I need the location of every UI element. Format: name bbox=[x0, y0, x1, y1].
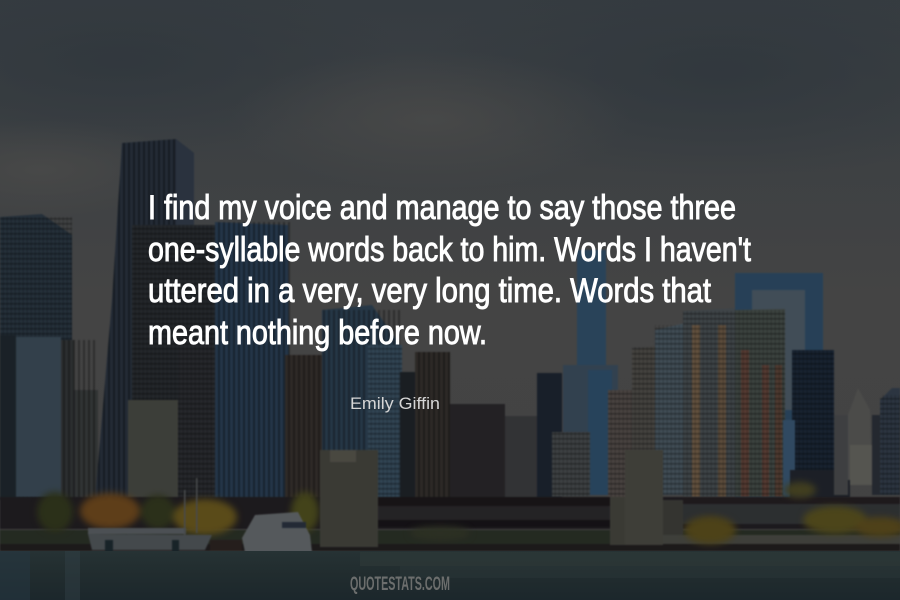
quote line 3: uttered in a very, very long time. Words that bbox=[148, 272, 711, 310]
far right towers bbox=[834, 415, 848, 495]
quote line 1: I find my voice and manage to say those three bbox=[148, 189, 736, 227]
quote line 2: one-syllable words back to him. Words I haven't bbox=[148, 231, 751, 269]
autumn trees bbox=[37, 482, 900, 544]
center blue tower bbox=[577, 250, 606, 370]
author name: Emily Giffin bbox=[350, 394, 440, 413]
left block bbox=[0, 214, 72, 500]
right residential towers bbox=[632, 345, 664, 495]
quote line 4: meant nothing before now. bbox=[148, 314, 487, 352]
shoreline bbox=[0, 530, 900, 550]
tall left tower bbox=[95, 139, 194, 500]
boat right bbox=[242, 512, 312, 552]
mid towers bbox=[132, 225, 216, 500]
background: city skyline bbox=[0, 139, 900, 500]
background: river bbox=[0, 551, 900, 600]
blue skyscraper bbox=[735, 273, 823, 498]
center dark block bbox=[450, 404, 505, 499]
quote text bbox=[148, 189, 751, 352]
boat left bbox=[88, 528, 186, 534]
bridges bbox=[0, 497, 900, 529]
bridge pier centre bbox=[320, 450, 378, 547]
background: waterfront with bridges, trees and boats bbox=[0, 450, 900, 555]
bridge pier right bbox=[610, 497, 628, 545]
watermark: QUOTESTATS.COM bbox=[350, 574, 450, 595]
